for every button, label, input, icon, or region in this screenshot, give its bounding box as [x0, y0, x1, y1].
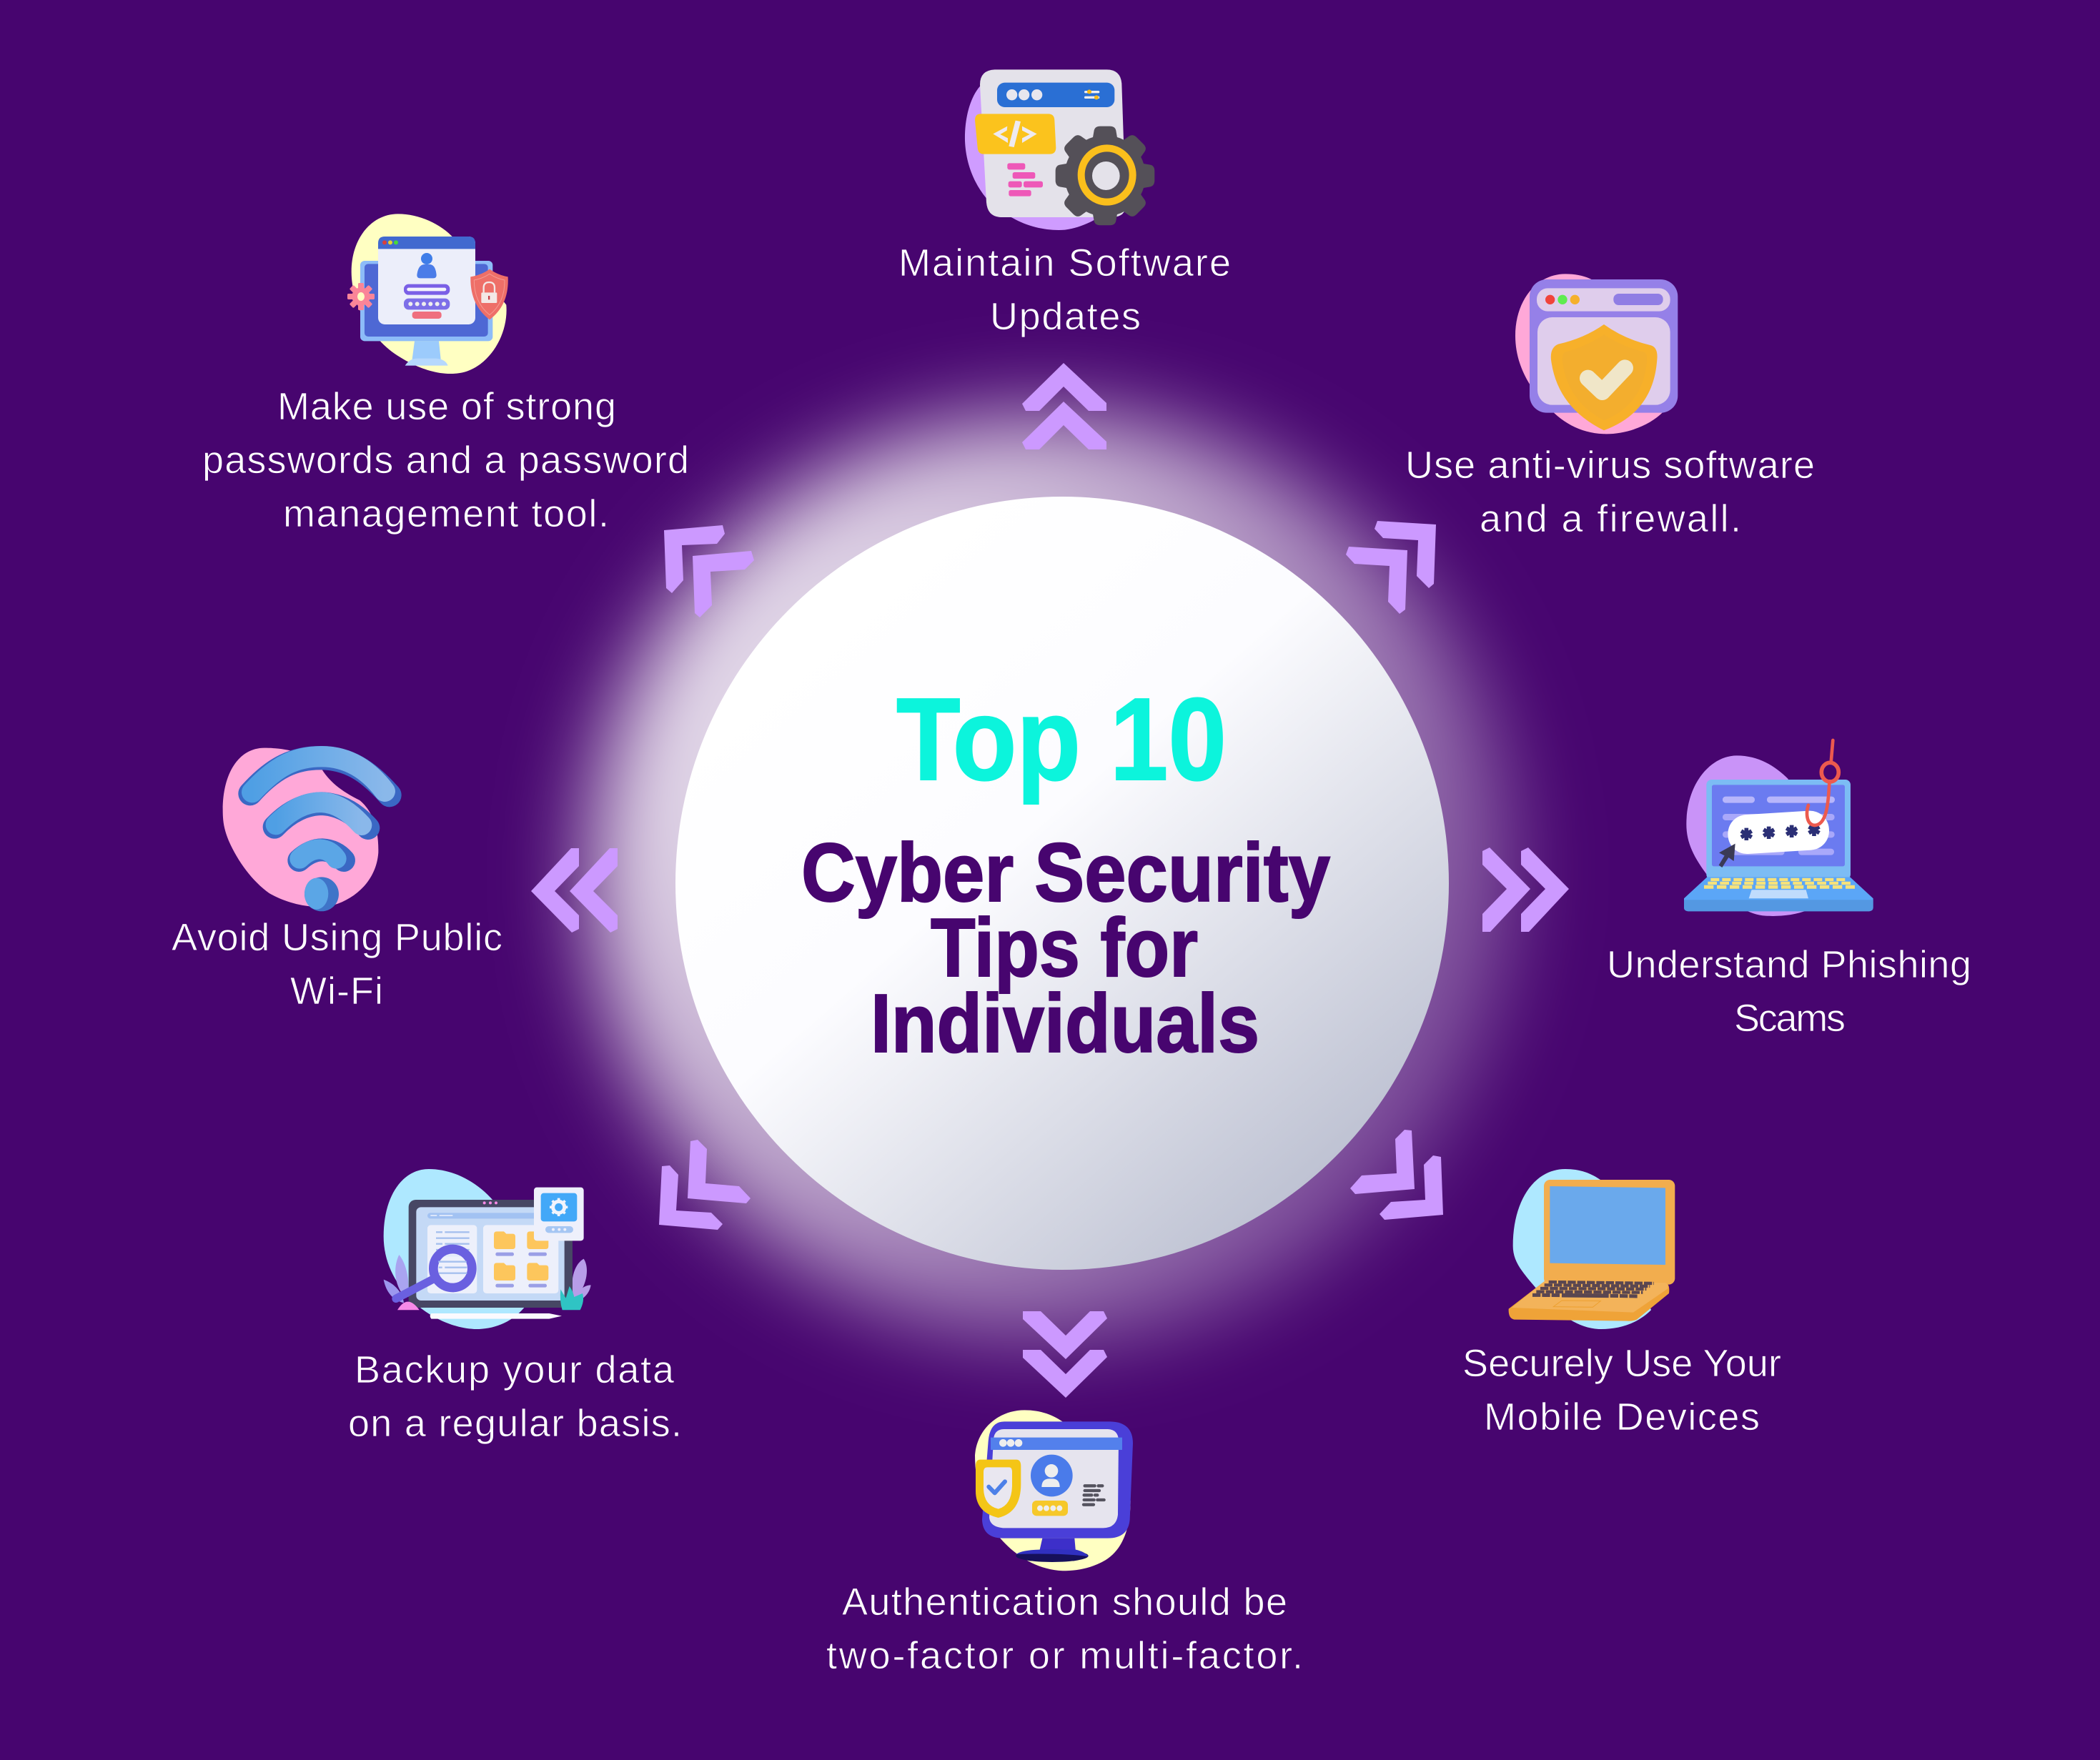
label: strong passwords: passwords and a password	[202, 439, 689, 482]
arrow: left	[531, 848, 618, 933]
label: maintain software updates: Updates	[990, 295, 1141, 338]
arrow: down	[1023, 1311, 1107, 1398]
panel: avoid public wi-fi	[172, 748, 502, 1013]
icon: tablet with folders and magnifier	[384, 1169, 591, 1329]
label: understand phishing scams	[1607, 943, 1971, 1040]
glow behind central circle	[591, 415, 1513, 1337]
panel: securely use mobile devices	[1462, 1169, 1781, 1438]
label: backup data: on a regular basis.	[348, 1402, 682, 1445]
label: two-factor authentication: two-factor or multi-factor.	[826, 1634, 1303, 1677]
arrow: right	[1482, 847, 1569, 932]
panel: backup data	[348, 1169, 682, 1445]
label: strong passwords	[202, 385, 689, 535]
label: understand phishing scams: Scams	[1734, 997, 1846, 1040]
panel: two-factor authentication	[826, 1410, 1303, 1677]
label: backup data	[348, 1348, 682, 1445]
label: strong passwords: Make use of strong	[277, 385, 616, 428]
icon: wi-fi signal	[223, 748, 390, 911]
icon: monitor with shield and user	[975, 1410, 1133, 1571]
central circle	[675, 497, 1449, 1270]
label: securely use mobile devices: Securely Use Your	[1462, 1342, 1781, 1385]
icon: laptop with password on fishing hook	[1684, 740, 1873, 916]
title: Individuals: Individuals	[871, 977, 1259, 1070]
panel: strong passwords	[202, 214, 689, 535]
title: Cyber Security: Cyber Security	[801, 826, 1330, 919]
icon: monitor with login window and shield	[347, 214, 508, 374]
label: avoid public wi-fi	[172, 916, 502, 1013]
title: Top 10: Top 10	[896, 674, 1227, 805]
icon: browser window with shield	[1515, 274, 1678, 434]
arrow: down left	[659, 1140, 751, 1230]
title: Tips for: Tips for	[931, 901, 1198, 994]
label: securely use mobile devices	[1462, 1342, 1781, 1438]
label: anti-virus and firewall	[1405, 444, 1815, 540]
icon: code window and gear	[965, 69, 1154, 230]
arrow: down right	[1350, 1130, 1443, 1220]
panel: maintain software updates	[898, 69, 1231, 338]
label: two-factor authentication: Authentication should be	[842, 1581, 1287, 1624]
label: anti-virus and firewall: and a firewall.	[1480, 497, 1741, 540]
label: two-factor authentication	[826, 1581, 1303, 1677]
label: backup data: Backup your data	[355, 1348, 675, 1391]
label: securely use mobile devices: Mobile Devices	[1484, 1396, 1760, 1438]
label: understand phishing scams: Understand Phishing	[1607, 943, 1971, 986]
label: avoid public wi-fi: Wi-Fi	[290, 970, 383, 1013]
label: anti-virus and firewall: Use anti-virus software	[1405, 444, 1815, 487]
label: avoid public wi-fi: Avoid Using Public	[172, 916, 502, 959]
arrow: up left	[664, 525, 754, 617]
panel: anti-virus and firewall	[1405, 274, 1815, 540]
label: strong passwords: management tool.	[283, 492, 609, 535]
label: maintain software updates	[898, 242, 1231, 338]
arrow: up	[1022, 363, 1106, 449]
title	[801, 674, 1330, 1070]
icon: orange laptop	[1509, 1169, 1675, 1329]
panel: understand phishing scams	[1607, 740, 1971, 1040]
arrow: up right	[1346, 521, 1436, 614]
label: maintain software updates: Maintain Software	[898, 242, 1231, 284]
